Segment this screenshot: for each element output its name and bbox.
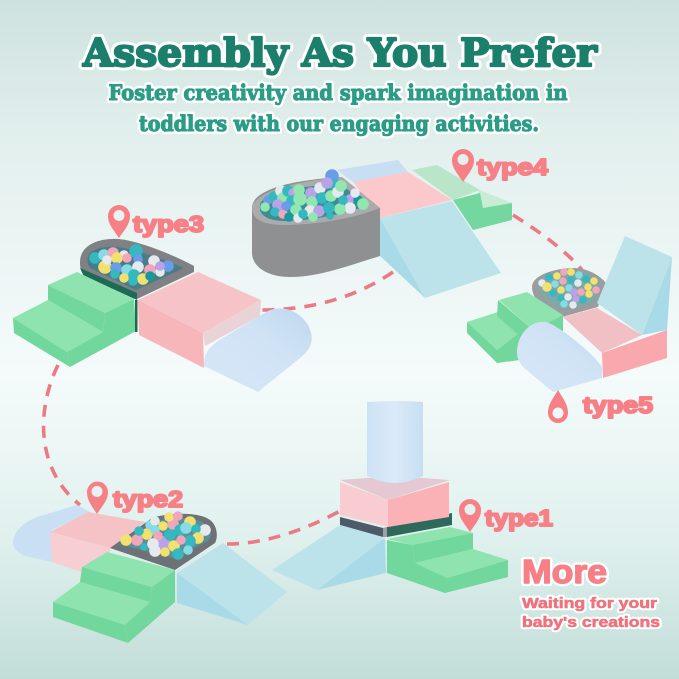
blue wedge (type4) [380, 201, 501, 298]
pin: type2 [87, 482, 108, 514]
pink block (type4) [353, 172, 452, 218]
subtitle [108, 80, 568, 136]
ball pool (type4) [252, 170, 380, 277]
subtitle: toddlers with our engaging activities. [139, 111, 539, 136]
callout: more: More [522, 553, 607, 590]
pink block (type3) [138, 272, 261, 368]
ball pool (type5) [532, 268, 606, 317]
pin: type5 [548, 390, 568, 423]
ball pool (type2) [110, 512, 217, 570]
green steps (type1) [387, 527, 508, 593]
subtitle: toddlers with our engaging activities. [139, 111, 539, 136]
pin: type4 [452, 149, 474, 182]
assembly: type5 [467, 236, 672, 392]
label: type2: type2 [113, 486, 183, 512]
green steps (type3) [13, 272, 138, 367]
blue wedge (type2) [177, 543, 287, 625]
callout: more: baby's creations [522, 614, 660, 631]
assembly: type1 [272, 401, 508, 593]
green steps (type5) [467, 292, 563, 363]
green steps (type2) [53, 552, 175, 643]
half cylinder behind (type4) [337, 160, 408, 182]
label: type3: type3 [133, 211, 204, 237]
callout: more: More [522, 553, 607, 590]
green steps (type4) [412, 165, 512, 230]
cylinder (type1) [367, 401, 423, 483]
half cylinder (type2) [13, 505, 90, 562]
dashed path: type2 to type1 [227, 511, 340, 544]
blue wedge (type5) [597, 236, 672, 335]
callout: more: Waiting for your [522, 595, 657, 612]
assembly: type4 [252, 160, 512, 298]
half cylinder (type3) [204, 308, 312, 392]
dashed path: type4 to type5 [513, 215, 582, 270]
dashed path: type4 to type3 [262, 272, 393, 310]
pink block (type2) [50, 512, 145, 572]
dark base [340, 513, 452, 537]
dashed path: type3 to type2 [44, 365, 80, 505]
label: type4: type4 [477, 154, 548, 180]
callout: more [522, 553, 660, 631]
assembly: type2 [13, 505, 287, 643]
ball pool (type3) [80, 239, 194, 300]
subtitle: Foster creativity and spark imagination in [108, 80, 568, 105]
pin: type3 [108, 205, 130, 238]
assembly: type3 [13, 239, 312, 392]
callout: more: baby's creations [522, 614, 660, 631]
blue wedge (type1) [272, 525, 386, 590]
label: type5: type5 [583, 392, 653, 418]
label: type1: type1 [485, 505, 553, 531]
title: Assembly As You Prefer [82, 30, 598, 75]
pink block (type1) [340, 478, 450, 527]
subtitle: Foster creativity and spark imagination in [108, 80, 568, 105]
title: Assembly As You Prefer [82, 30, 598, 75]
callout: more: Waiting for your [522, 595, 657, 612]
half cylinder (type5) [517, 322, 602, 392]
pink block (type5) [563, 308, 667, 378]
pin: type1 [459, 499, 481, 532]
